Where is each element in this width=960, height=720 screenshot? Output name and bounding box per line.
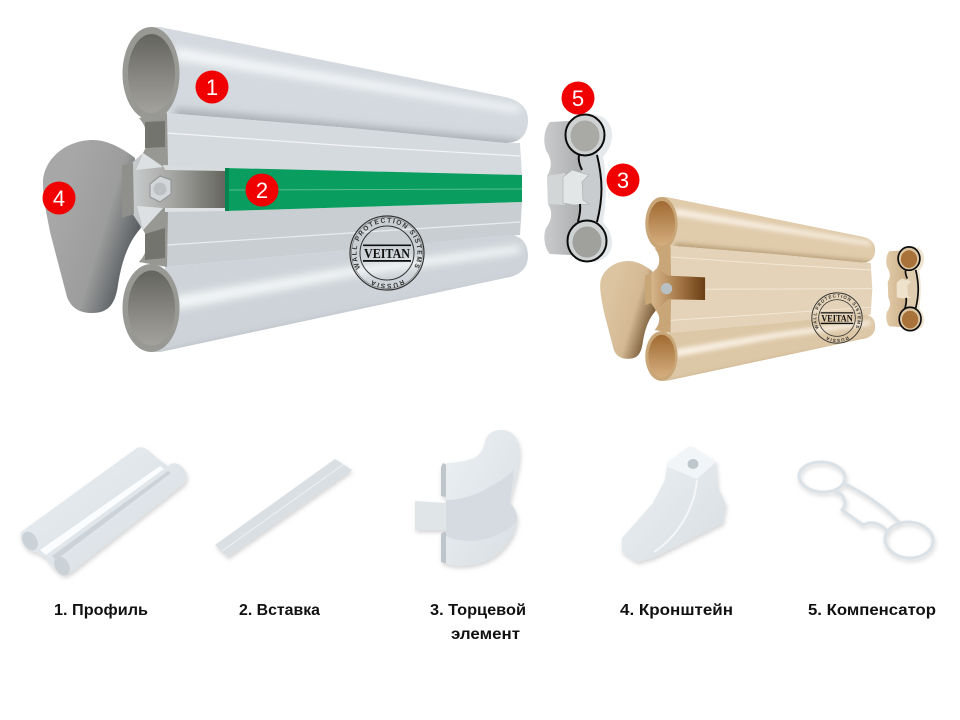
beige upper ring [645,197,678,250]
slot facets [136,153,163,230]
label 3: 3. Торцевой [430,602,526,619]
label 3 [430,602,526,643]
green insert (item 2) [225,168,522,211]
beige upper tube [662,197,876,262]
upper tube ring [122,27,180,120]
label 2: 2. Вставка [239,602,320,619]
panel: beige end cap [886,247,924,331]
stamp: VEITAN large: WALL PROTECTION SISTEMS [352,218,422,270]
marker 3: 3 [617,168,629,193]
stamp: VEITAN large: VEITAN [364,246,410,261]
label 3: элемент [451,626,520,643]
marker 5 [562,82,594,114]
bottom ring [568,220,606,262]
lower panel groove [167,222,520,245]
beige lower tube [662,314,876,381]
label 5: 5. Компенсатор [808,602,936,619]
panel: grey profile assembly [43,20,540,368]
panel: beige profile assembly [600,193,882,390]
stamp: VEITAN small: WALL PROTECTION SISTEMS [813,294,861,330]
part: bracket [622,446,726,562]
beige webs [655,246,671,276]
beige cap centre [906,267,918,312]
profile body [21,447,187,574]
beige slot [651,268,705,312]
beige cap body [886,250,912,328]
stamp: VEITAN small: VEITAN [821,313,853,323]
marker 3 [606,164,640,196]
beige lower ring [645,331,678,381]
lower tube ring [122,264,180,352]
marker 4 [42,182,76,214]
beige bottom ring [899,307,921,331]
stamp: VEITAN small [811,292,863,344]
marker 1: 1 [206,75,218,100]
part: compensator [798,460,934,560]
marker 2: 2 [256,178,268,203]
beige flange [645,274,652,305]
stamp: VEITAN small: RUSSIA [826,336,849,342]
part: insert [215,459,352,557]
cap centre [579,150,601,228]
beige bracket [600,261,656,359]
flange [122,163,134,218]
label 4: 4. Кронштейн [620,602,733,619]
beige bolt [661,283,672,294]
bracket (item 4) [43,140,141,313]
beige panel [669,246,872,333]
cap mid band [446,470,517,541]
lower panel [165,202,522,267]
panel: grey end cap (item 3) [544,114,612,262]
beige gasket lines [905,270,918,308]
gasket lines (item 5) [578,155,602,222]
top ring [566,114,604,156]
tab [415,501,446,530]
stamp: VEITAN large [349,215,425,291]
beige top ring [898,247,920,270]
centre bracket [547,170,589,205]
upper tube [152,27,528,143]
bolt [150,176,171,202]
upper panel groove [167,133,520,156]
centre slot [132,153,225,230]
lower web [139,208,168,267]
marker 1 [196,70,228,104]
cap body [446,430,520,566]
marker 2 [246,174,278,206]
slot lip [163,165,225,171]
tube ends [19,529,41,553]
channel shadow [52,471,171,560]
cap white rim [590,114,612,262]
cap body [544,120,590,256]
upper web [139,113,168,167]
label 1: 1. Профиль [54,602,148,619]
stamp: VEITAN large: RUSSIA [372,280,404,288]
marker 5: 5 [572,86,584,111]
beige cap rim [912,247,924,331]
upper panel [167,113,522,176]
beige grooves [670,257,872,320]
part: profile [19,447,187,578]
part: end element [415,430,520,566]
channel highlight [40,466,164,555]
lower tube [152,236,528,352]
marker 4: 4 [53,186,65,211]
